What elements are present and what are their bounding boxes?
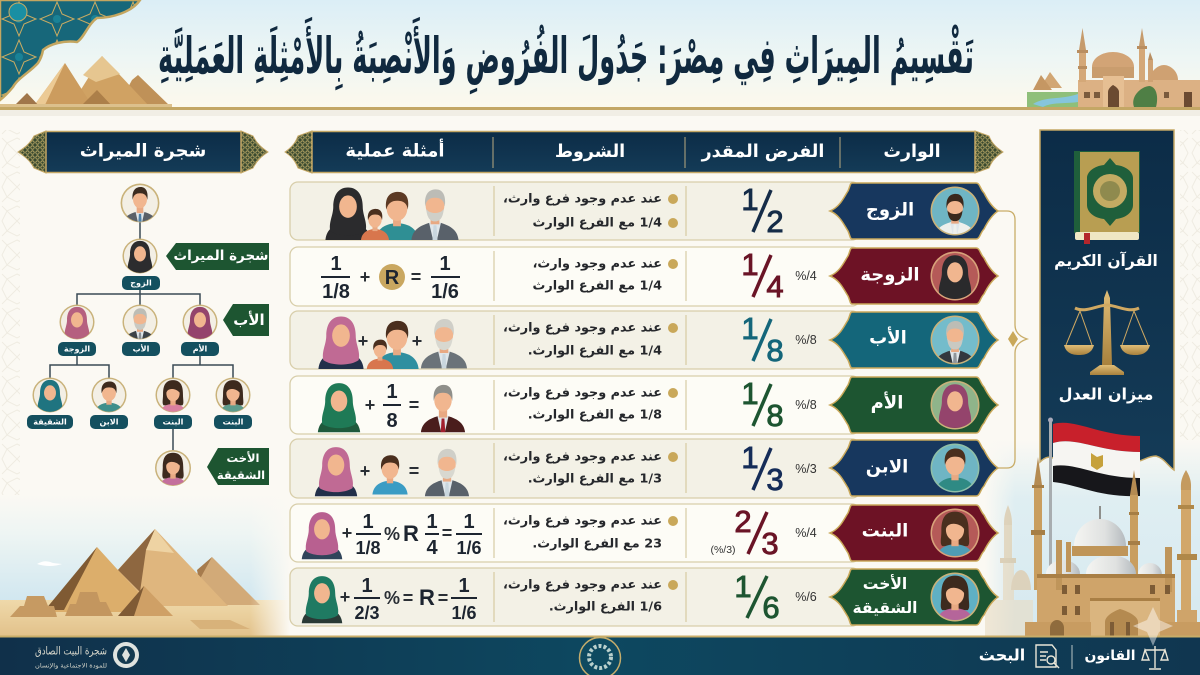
example math: [321, 253, 460, 303]
share fraction: 8: [766, 333, 784, 368]
heir badge: [830, 440, 998, 496]
share fraction: 1: [741, 440, 759, 475]
conditions: [503, 578, 678, 614]
conditions: 1/4 مع الفرع الوارث: [533, 216, 662, 230]
share fraction: 4: [766, 269, 784, 304]
callout: father: [223, 304, 269, 336]
column: heir: الوارث: [883, 142, 941, 162]
conditions: [503, 192, 678, 230]
panel: inheritance tree: [18, 131, 269, 488]
label: second daughter pill: البنت: [223, 418, 244, 426]
example people: [325, 187, 459, 240]
footer logo text: للمودة الاجتماعية والإنسان: [35, 662, 107, 670]
faded minaret and dome: [985, 505, 1033, 637]
heir badge: الابن: [866, 456, 908, 478]
heir badge: [830, 377, 998, 433]
mosque building: [1025, 540, 1200, 637]
share fraction: %/8: [795, 398, 817, 412]
label: daughter pill: البنت: [163, 418, 184, 426]
footer bar: [0, 607, 1200, 675]
node: daughter: [155, 377, 191, 414]
icon: scales of justice: [1064, 290, 1150, 375]
share fraction: 1: [741, 182, 759, 217]
mosque sky backdrop: [985, 440, 1200, 637]
heir badge: [830, 312, 998, 368]
conditions: 1/6 الفرع الوارث.: [549, 600, 662, 614]
label: sister pill: [27, 415, 73, 429]
conditions: عند عدم وجود فرع وارث،: [503, 192, 662, 206]
example: 1: [386, 381, 398, 403]
label: son pill: [90, 415, 128, 429]
example math: 1/8: [322, 281, 350, 303]
example math: =: [438, 588, 448, 608]
example math: +: [342, 523, 352, 543]
callout: inheritance tree: شجرة الميراث: [174, 248, 268, 264]
example math: 1/6: [431, 281, 459, 303]
heir badge: [830, 183, 998, 239]
column: share: الفرض المقدر: [701, 142, 824, 162]
right side pattern: [1180, 130, 1200, 460]
conditions: 1/8 مع الفرع الوارث.: [528, 408, 662, 422]
callout: full sister: الأخت: [227, 451, 259, 465]
example: +: [365, 395, 375, 415]
heir badge: الأب: [869, 326, 907, 348]
example people: [318, 316, 467, 369]
footer logo text: [35, 644, 107, 670]
example math: [302, 511, 482, 559]
row: daughter: [290, 504, 998, 562]
example math: =: [411, 267, 421, 287]
share fraction: 3: [761, 526, 779, 561]
example: 8: [386, 410, 398, 432]
example people: [315, 447, 469, 496]
share fraction: [710, 504, 817, 561]
header band: [0, 0, 1200, 116]
callout: full sister: الشقيقة: [217, 468, 265, 482]
node: father: [122, 304, 158, 342]
share fraction: 2: [734, 504, 752, 539]
example math: +: [360, 267, 370, 287]
conditions: عند عدم وجود وارث،: [533, 256, 662, 272]
example math: 1: [362, 511, 374, 533]
share fraction: 1: [734, 569, 752, 604]
heir badge: الأخت: [863, 574, 907, 593]
footer label: search: البحث: [979, 646, 1025, 664]
conditions: [503, 386, 678, 422]
left side pattern: [0, 130, 20, 510]
label: father pill: الأب: [133, 344, 150, 354]
header mosque skyline: [1027, 28, 1200, 107]
header pyramids: [0, 56, 172, 107]
example people: +: [360, 461, 370, 481]
share fraction: (%/3): [710, 544, 736, 556]
heir badge: [830, 569, 998, 625]
share fraction: %/6: [795, 590, 817, 604]
example math: 1: [458, 575, 470, 597]
conditions: 1/3 مع الفرع الوارث.: [528, 472, 662, 486]
example math: %: [384, 524, 400, 544]
example math: =: [403, 588, 413, 608]
panel: right navy banner: [1040, 130, 1174, 470]
label: mother pill: [181, 342, 219, 356]
share fraction: %/4: [795, 269, 817, 283]
example math: 1: [463, 511, 475, 533]
row: wife: [290, 247, 998, 306]
conditions: 23 مع الفرع الوارث.: [532, 536, 662, 552]
share fraction: 3: [766, 462, 784, 497]
label: mother pill: الأم: [193, 344, 208, 354]
example people: +: [358, 331, 368, 351]
row: son: [290, 439, 998, 498]
label: son pill: الابن: [100, 418, 119, 426]
share fraction: [741, 440, 817, 497]
share fraction: [741, 247, 817, 304]
share fraction: 1: [741, 376, 759, 411]
node: sister: [32, 377, 68, 415]
row: full sister: [290, 568, 998, 626]
example math: 4: [426, 537, 438, 559]
label: second daughter pill: [214, 415, 252, 429]
heir badge: البنت: [862, 520, 908, 542]
tree heading: [18, 131, 268, 173]
footer emblem: [113, 642, 139, 668]
sparkle watermark: [1133, 607, 1173, 646]
example math: R: [403, 521, 419, 546]
node: son: [91, 377, 127, 414]
bracket connector: [998, 211, 1027, 468]
bottom right mosque: [985, 457, 1200, 637]
row: husband: [290, 182, 998, 240]
footer central seal: [580, 638, 620, 675]
heir badge: الزوجة: [860, 264, 920, 286]
example math: R: [385, 267, 400, 289]
node: wife: [122, 238, 158, 276]
example math: R: [419, 585, 435, 610]
share fraction: 1: [741, 247, 759, 282]
node: full sister: [155, 450, 191, 488]
callout: father: الأب: [233, 311, 265, 329]
row: mother: [290, 376, 998, 434]
label: father pill: [122, 342, 160, 356]
share fraction: %/3: [795, 462, 817, 476]
conditions: 1/4 مع الفرع الوارث.: [528, 344, 662, 358]
label: husband pill: الزوج: [130, 278, 152, 288]
conditions: عند عدم وجود فرع وارث،: [503, 386, 662, 400]
footer label: law: القانون: [1084, 648, 1136, 664]
conditions: عند عدم وجود فرع وارث،: [503, 320, 662, 336]
example math: 1: [361, 575, 373, 597]
example people: +: [412, 331, 422, 351]
far right minaret: [1177, 470, 1197, 637]
node: mother: [182, 304, 218, 342]
share fraction: [741, 182, 784, 239]
right slim minaret: [1128, 470, 1140, 580]
example math: 1: [439, 253, 451, 275]
heir badge: [830, 505, 998, 561]
example math: 1/6: [451, 603, 477, 623]
row: father: [290, 311, 998, 369]
example math: 1: [330, 253, 342, 275]
example math: 1/8: [355, 538, 381, 558]
example math: [302, 575, 477, 623]
conditions: عند عدم وجود فرع وارث،: [503, 514, 662, 528]
corner ornament: [0, 0, 140, 100]
heir badge: الأم: [871, 392, 903, 414]
left minaret: [1031, 457, 1045, 590]
callout: inheritance tree: [166, 243, 269, 270]
example: [318, 381, 465, 432]
example: =: [409, 395, 419, 415]
column: examples: أمثلة عملية: [345, 138, 445, 162]
footer icon: scales: [1142, 646, 1168, 669]
conditions: 1/4 مع الفرع الوارث: [533, 278, 662, 294]
share fraction: 1: [741, 311, 759, 346]
label: daughter pill: [154, 415, 192, 429]
node: top man: [121, 184, 159, 225]
label: husband pill: [122, 276, 160, 290]
share fraction: [741, 376, 817, 433]
label: wife pill: الزوجة: [64, 344, 90, 354]
icon: Quran book: [1074, 151, 1140, 244]
share fraction: [734, 569, 817, 625]
share fraction: 2: [766, 204, 784, 239]
column: conditions: الشروط: [555, 142, 625, 162]
conditions: [503, 450, 678, 486]
conditions: عند عدم وجود فرع وارث،: [503, 578, 662, 592]
example math: %: [384, 588, 400, 608]
label: Holy Quran: القرآن الكريم: [1054, 251, 1158, 270]
heir badge: [830, 248, 998, 304]
share fraction: [741, 311, 817, 368]
label: wife pill: [58, 342, 96, 356]
footer logo text: شجرة البيت الصادق: [35, 644, 107, 658]
tree connectors: [50, 222, 233, 450]
example math: +: [340, 587, 350, 607]
label: sister pill: الشقيقة: [33, 418, 67, 426]
heir badge: الزوج: [866, 200, 914, 220]
conditions: عند عدم وجود فرع وارث،: [503, 450, 662, 464]
example math: 1/6: [456, 538, 482, 558]
share fraction: %/8: [795, 333, 817, 347]
example people: =: [409, 461, 419, 481]
example math: 1: [426, 511, 438, 533]
table header: [285, 131, 1003, 173]
conditions: [503, 320, 678, 358]
callout: full sister: [207, 448, 269, 485]
footer icon: document search: [1036, 645, 1059, 668]
node: second daughter: [215, 377, 251, 414]
conditions: [533, 256, 678, 294]
example math: 2/3: [354, 603, 380, 623]
tree heading: شجرة الميراث: [80, 140, 206, 162]
node: wife branch: [59, 304, 95, 342]
left landscape with pyramids: [0, 495, 290, 637]
example math: =: [442, 523, 452, 543]
share fraction: 8: [766, 398, 784, 433]
domes: [1046, 506, 1162, 598]
icon: Egyptian flag: [1048, 418, 1140, 574]
label: scale of justice: ميزان العدل: [1059, 384, 1153, 404]
share fraction: %/4: [795, 526, 817, 540]
conditions: [503, 514, 678, 552]
share fraction: 6: [762, 590, 780, 625]
heir badge: الشقيقة: [853, 599, 917, 617]
